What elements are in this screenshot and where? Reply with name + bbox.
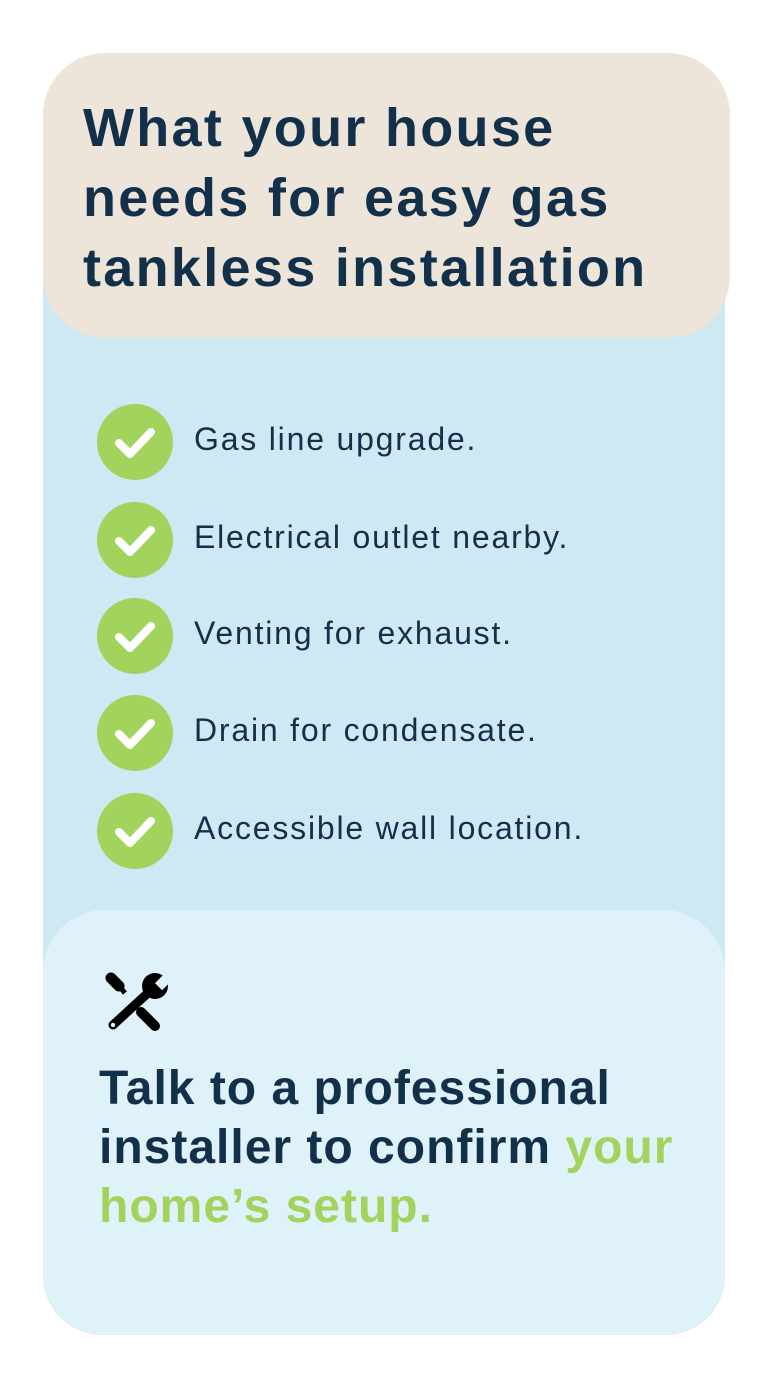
item: gas line: Gas line upgrade. <box>194 421 477 457</box>
item: venting <box>97 598 513 674</box>
callout text: Talk to a professional <box>99 1062 611 1115</box>
item: wall <box>97 793 584 869</box>
checklist <box>97 404 584 869</box>
icon: tools <box>106 972 168 1031</box>
item: electrical <box>97 502 569 578</box>
callout text <box>99 1062 673 1233</box>
callout text: home’s setup. <box>99 1180 433 1233</box>
item: wall: Accessible wall location. <box>194 810 584 846</box>
panel: blue background <box>43 200 725 1335</box>
title: tankless installation <box>83 238 647 298</box>
item: venting: Venting for exhaust. <box>194 615 513 651</box>
title <box>83 98 647 298</box>
item: electrical: Electrical outlet nearby. <box>194 519 569 555</box>
item: drain <box>97 695 538 771</box>
item: gas line <box>97 404 477 480</box>
item: drain: Drain for condensate. <box>194 712 538 748</box>
title: needs for easy gas <box>83 168 611 228</box>
panel: title <box>43 53 730 338</box>
callout text: installer to confirm your <box>99 1121 673 1174</box>
panel: callout <box>43 910 725 1335</box>
title: What your house <box>83 98 556 158</box>
